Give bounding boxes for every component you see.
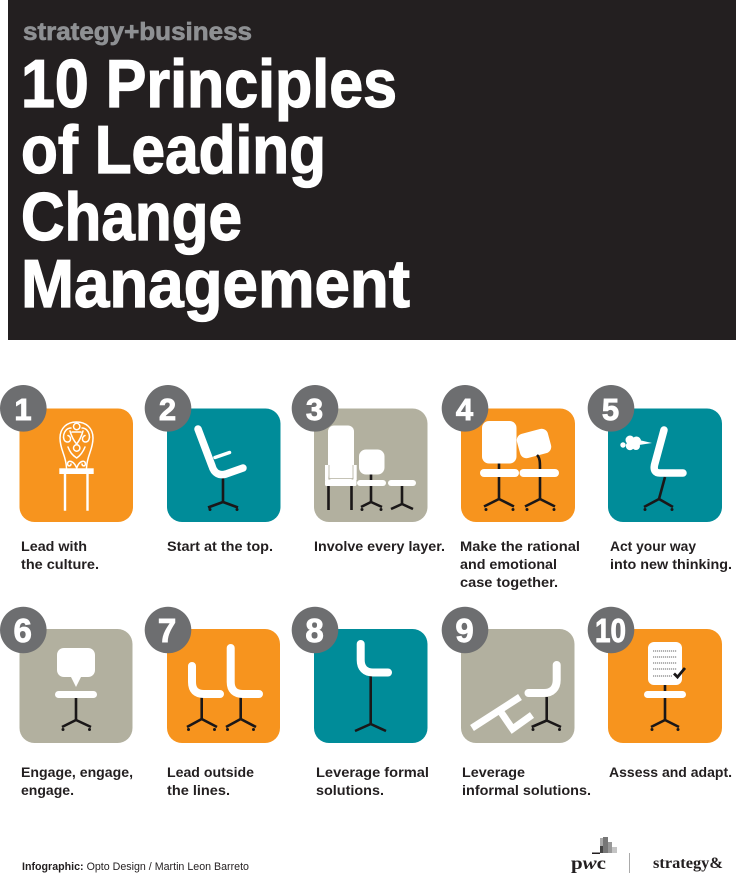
number badge 5 — [588, 385, 634, 432]
caption 8: Leverage formal — [316, 764, 429, 780]
number badge 5: 5 — [602, 392, 619, 427]
publication name: strategy+business — [23, 18, 252, 46]
header panel — [8, 0, 736, 340]
title: 10 Principles — [21, 46, 397, 122]
icon: tall stool chair — [355, 644, 388, 731]
panel: principle 1 — [0, 385, 133, 572]
credit line: Infographic: Opto Design / Martin Leon Barreto — [22, 861, 249, 873]
icon: reclining executive chair — [198, 429, 243, 511]
number badge 10: 10 — [595, 612, 626, 649]
number badge 1: 1 — [14, 392, 32, 427]
number badge 1 — [0, 385, 47, 432]
number badge 2 — [145, 385, 191, 432]
icon: two chairs side by side — [187, 648, 259, 731]
caption 7: the lines. — [167, 782, 230, 798]
caption 4: and emotional — [460, 556, 557, 572]
caption 7: Lead outside — [167, 764, 254, 780]
caption 1: the culture. — [21, 556, 99, 572]
panel: principle 6 — [0, 607, 133, 798]
caption 4: Make the rational — [460, 538, 580, 554]
panel: principle 4 — [442, 385, 580, 590]
caption 10: Assess and adapt. — [609, 764, 732, 780]
number badge 4: 4 — [456, 392, 474, 427]
number badge 4 — [442, 385, 488, 432]
title — [21, 46, 410, 322]
icon: chair with puff of smoke — [620, 430, 683, 511]
number badge 6: 6 — [14, 612, 32, 649]
caption 1: Lead with — [21, 538, 87, 554]
icon: chair and fallen chair — [472, 665, 561, 731]
number badge 8: 8 — [305, 612, 324, 649]
icon: two chairs, one with tilted back — [480, 421, 559, 511]
number badge 6 — [0, 607, 47, 653]
icon: ornate cafe chair — [59, 422, 94, 511]
icon: chair with checklist back — [644, 642, 686, 731]
number badge 9: 9 — [455, 612, 474, 649]
panel: principle 7 — [145, 607, 280, 798]
number badge 3 — [292, 385, 338, 432]
number badge 10 — [588, 607, 634, 653]
number badge 7 — [145, 607, 191, 653]
title: Change — [21, 179, 242, 255]
title: Management — [21, 246, 410, 322]
caption 3: Involve every layer. — [314, 538, 445, 554]
panel: principle 2 — [145, 385, 280, 554]
caption 5: into new thinking. — [610, 556, 732, 572]
caption 9: informal solutions. — [462, 782, 591, 798]
logo divider — [629, 853, 630, 873]
caption 8: solutions. — [316, 782, 384, 798]
number badge 9 — [442, 607, 488, 653]
title: of Leading — [21, 112, 326, 188]
panel: principle 8 — [292, 607, 429, 798]
number badge 3: 3 — [306, 392, 323, 427]
caption 9: Leverage — [462, 764, 525, 780]
logo: PwC: pwc — [571, 853, 606, 873]
number badge 2: 2 — [159, 392, 176, 427]
logo: strategy&: strategy& — [653, 855, 723, 872]
panel: principle 3 — [292, 385, 445, 554]
icon: three chairs of decreasing height — [325, 426, 416, 511]
number badge 8 — [292, 607, 338, 653]
panel: principle 5 — [588, 385, 732, 572]
panel: principle 9 — [442, 607, 591, 798]
panel: principle 10 — [588, 607, 732, 780]
logo: PwC — [571, 837, 617, 873]
icon: chair with speech bubble back — [55, 648, 97, 731]
caption 2: Start at the top. — [167, 538, 273, 554]
number badge 7: 7 — [158, 612, 176, 649]
caption 5: Act your way — [610, 538, 696, 554]
caption 6: Engage, engage, — [21, 764, 133, 780]
caption 6: engage. — [21, 782, 74, 798]
caption 4: case together. — [460, 574, 558, 590]
